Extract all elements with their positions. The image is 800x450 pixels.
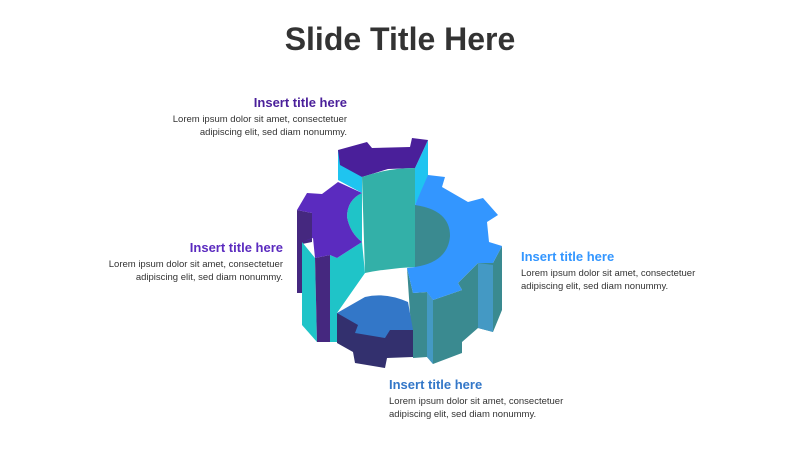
text block: right: Lorem ipsum dolor sit amet, consectetuer xyxy=(521,268,695,279)
text block: bottom: adipiscing elit, sed diam nonummy. xyxy=(389,409,536,420)
text block: right xyxy=(521,249,696,292)
text block: left: adipiscing elit, sed diam nonummy. xyxy=(136,272,283,283)
text block: right: Insert title here xyxy=(521,249,614,264)
text block: right: adipiscing elit, sed diam nonummy. xyxy=(521,281,668,292)
text block: bottom xyxy=(389,377,564,420)
text block: left: Lorem ipsum dolor sit amet, consectetuer xyxy=(109,259,283,270)
segment: right xyxy=(407,175,502,364)
segment: left xyxy=(297,182,365,342)
text block: bottom: Insert title here xyxy=(389,377,482,392)
text block: top: Lorem ipsum dolor sit amet, consectetuer xyxy=(173,114,347,125)
segment: center cylinder xyxy=(347,168,415,273)
text block: left: Insert title here xyxy=(190,240,283,255)
title: Slide Title Here xyxy=(285,21,515,57)
text block: bottom: Lorem ipsum dolor sit amet, consectetuer xyxy=(389,396,563,407)
segment: bottom xyxy=(337,295,413,368)
text block: top: Insert title here xyxy=(254,95,347,110)
text block: left xyxy=(109,240,283,283)
text block: top xyxy=(173,95,347,138)
segment: top xyxy=(338,138,428,205)
text block: top: adipiscing elit, sed diam nonummy. xyxy=(200,127,347,138)
